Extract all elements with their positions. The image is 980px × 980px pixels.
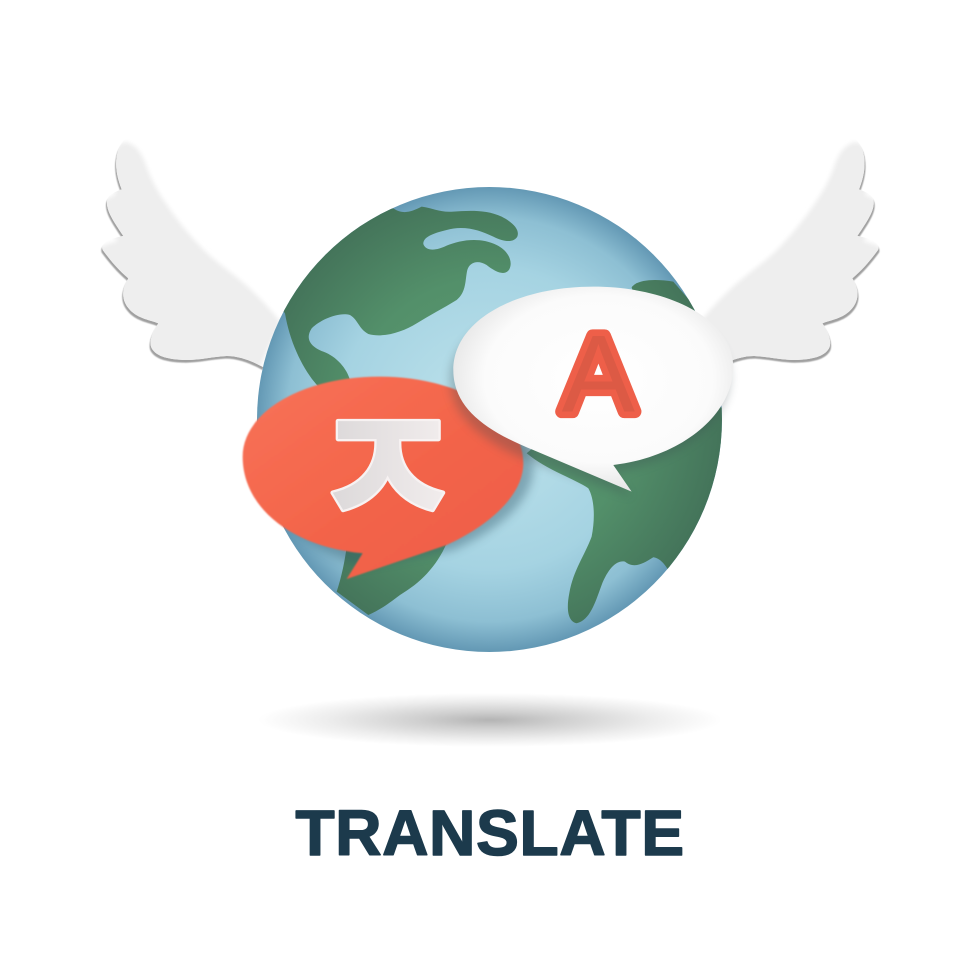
left wing <box>100 142 279 370</box>
continents <box>260 207 740 623</box>
white speech bubble <box>453 287 733 492</box>
continent: central america <box>337 543 447 615</box>
ground shadow <box>258 693 722 747</box>
continent: south america <box>527 407 740 623</box>
right wing <box>704 142 880 364</box>
glyph: letter A: A <box>562 313 636 436</box>
globe ocean <box>257 187 722 652</box>
translate infographic illustration <box>100 142 880 856</box>
glyph: hangul letter: ㅈ <box>309 333 466 579</box>
continent: upper right <box>632 280 695 311</box>
white bubble shadow <box>450 300 730 497</box>
red speech bubble <box>243 333 523 579</box>
red bubble shadow <box>295 444 538 565</box>
continent: north america <box>260 207 518 387</box>
title: TRANSLATE <box>296 797 684 869</box>
globe with bubbles <box>243 187 740 652</box>
